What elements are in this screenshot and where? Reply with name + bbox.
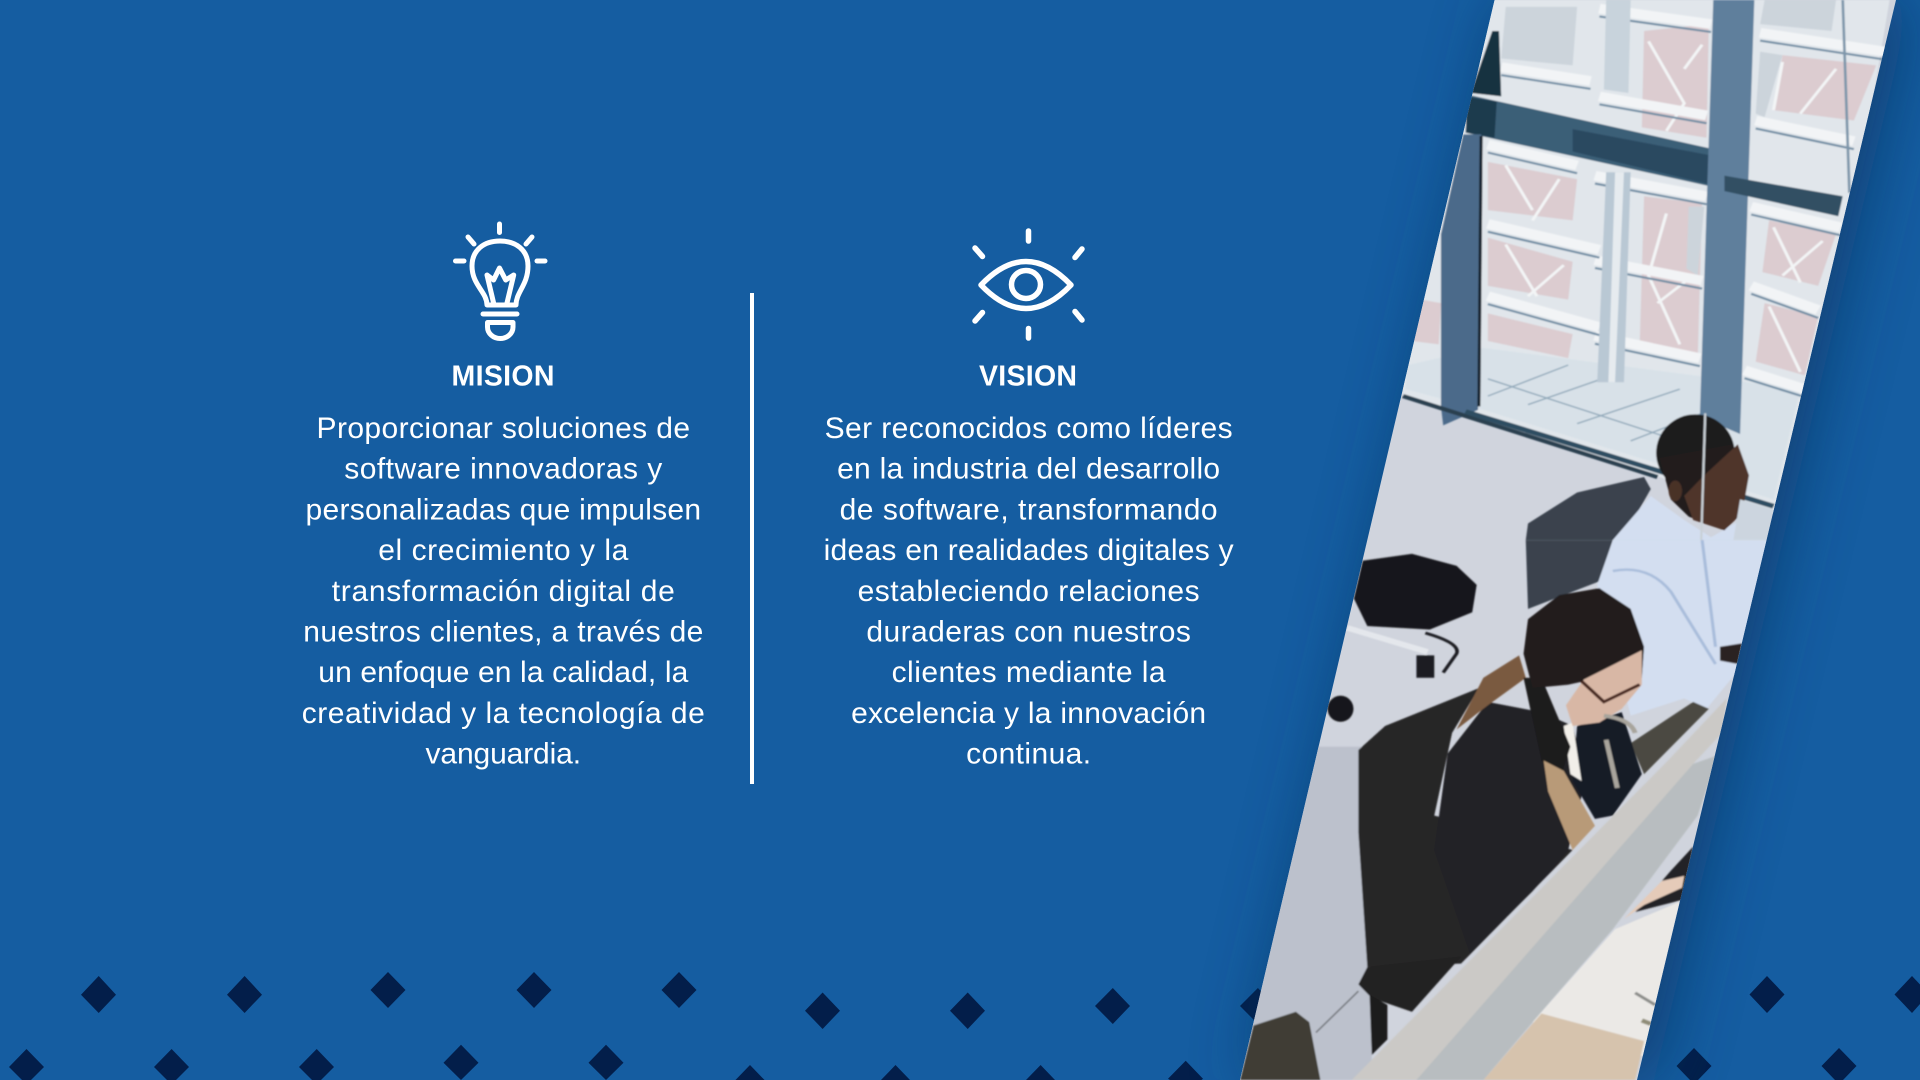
vertical divider (750, 293, 754, 784)
heading: MISION: MISION (452, 360, 554, 392)
text block: mision: vanguardia. (426, 738, 581, 771)
text block: mision: transformación digital de (332, 575, 675, 608)
text block: vision (824, 412, 1234, 771)
text block: mision: creatividad y la tecnología de (302, 697, 705, 730)
text block: vision: ideas en realidades digitales y (824, 534, 1234, 567)
text block: mision: nuestros clientes, a través de (303, 616, 703, 648)
text block: mision: el crecimiento y la (378, 534, 629, 567)
photo shadow (1250, 0, 1912, 1080)
icon: light bulb (456, 224, 545, 339)
text block: vision: en la industria del desarrollo (837, 453, 1220, 486)
text block: mision: un enfoque en la calidad, la (318, 656, 689, 689)
text block: vision: Ser reconocidos como líderes (825, 412, 1233, 445)
text block: vision: de software, transformando (840, 493, 1218, 526)
text block: mision: software innovadoras y (344, 453, 662, 486)
text block: vision: continua. (966, 738, 1091, 771)
icon: eye (975, 231, 1082, 338)
heading: VISION: VISION (979, 360, 1077, 392)
diamond pattern (9, 972, 1920, 1080)
text block: vision: clientes mediante la (892, 656, 1166, 689)
text block: vision: excelencia y la innovación (851, 697, 1206, 730)
text block: vision: estableciendo relaciones (858, 575, 1200, 608)
text block: mision: personalizadas que impulsen (306, 493, 701, 526)
photo: office workers in slanted frame (1220, 0, 1900, 1080)
text block: mision (302, 412, 705, 771)
text block: vision: duraderas con nuestros (866, 616, 1191, 648)
text block: mision: Proporcionar soluciones de (317, 412, 690, 445)
